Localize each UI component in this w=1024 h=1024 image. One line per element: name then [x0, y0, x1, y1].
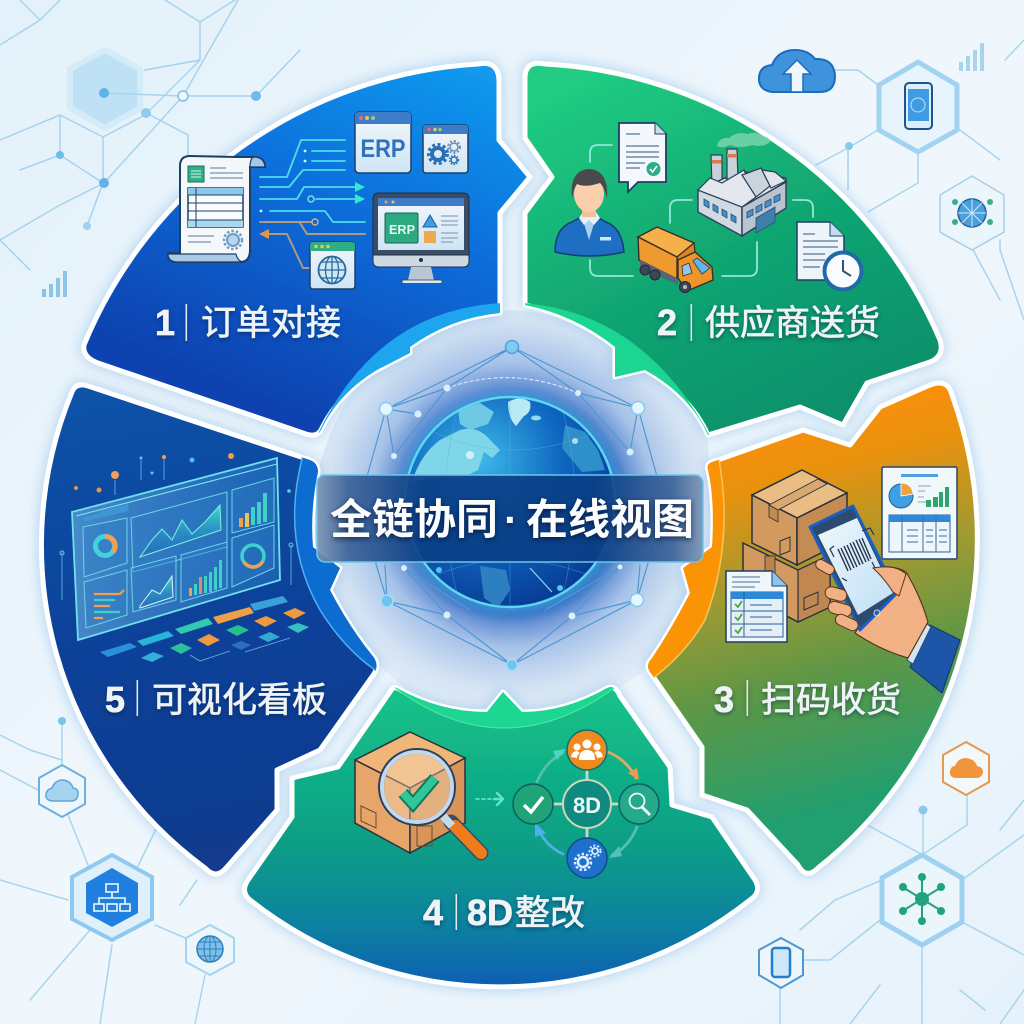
- icon: speech document: [619, 123, 666, 192]
- icon: document clock: [797, 222, 862, 290]
- icon: hand back: [855, 567, 928, 658]
- icon: fingers: [814, 558, 860, 633]
- icon: cloud upload: [759, 50, 835, 92]
- center halo: [313, 310, 712, 715]
- label: 8D corrective action: 整改: [515, 894, 585, 933]
- 8D cycle diagram: 8D: [573, 793, 601, 818]
- label: supplier delivery: 2: [657, 302, 677, 343]
- icon: hexagon orange cloud: [943, 742, 989, 795]
- network lines: [366, 347, 658, 665]
- panel 5: visual dashboard: [41, 385, 420, 874]
- icon: cuff: [907, 623, 931, 664]
- background network top left: [0, 0, 300, 270]
- background network bottom left: [0, 724, 205, 1024]
- label: order integration: 订单对接: [201, 304, 341, 343]
- label: visual dashboard: 5: [105, 679, 125, 720]
- label: 8D corrective action: 8D: [467, 892, 513, 933]
- icon: magnifier with check: [381, 751, 481, 853]
- title banner: [317, 475, 703, 562]
- icon: hexagon hierarchy: [72, 855, 152, 940]
- label: visual dashboard: 可视化看板: [152, 681, 327, 720]
- label: 8D corrective action: 4: [423, 892, 443, 933]
- label: order integration: 1: [155, 302, 175, 343]
- icon: small bar chart right: [959, 43, 984, 71]
- label: 8D corrective action: [423, 892, 585, 933]
- panel 1: order integration: [84, 63, 530, 440]
- icon: monitor with ERP: [373, 193, 469, 284]
- panel 3: scan receiving: [620, 383, 977, 873]
- indicator dots: [60, 453, 293, 600]
- icon: hexagon globe network: [940, 176, 1004, 250]
- globe: [398, 390, 622, 614]
- data flow lines: [259, 140, 365, 268]
- title banner: 在线视图: [526, 496, 694, 543]
- icon: truck: [638, 227, 713, 292]
- network nodes: [380, 340, 644, 670]
- arrow to 8D cycle: [476, 793, 503, 805]
- icon: order document: [168, 156, 265, 262]
- icon: hexagon globe: [186, 925, 234, 975]
- panel 2: supplier delivery: [522, 63, 941, 440]
- icon: small bar chart left: [42, 271, 67, 297]
- icon: report: [882, 467, 957, 559]
- label: scan receiving: 3: [714, 679, 734, 720]
- icon: smartphone scanning barcode: [810, 506, 897, 630]
- title banner: ·: [504, 496, 518, 543]
- center globe network: [366, 340, 658, 670]
- icon: hexagon phone: [879, 62, 957, 152]
- panel 4: 8D corrective action: [244, 650, 758, 987]
- icon: stacked boxes: [743, 470, 847, 622]
- icon: checklist: [726, 571, 787, 642]
- icon: gear window: [423, 125, 468, 173]
- icon: ERP window: [355, 112, 411, 173]
- title banner: 全链协同: [330, 496, 498, 543]
- icon: thumb: [873, 567, 906, 596]
- background network bottom right: [780, 794, 1024, 1024]
- icon: hand sleeve: [910, 625, 960, 693]
- icon: hexagon phone small: [759, 938, 803, 988]
- icon: hexagon green network: [882, 855, 962, 945]
- icon: box under magnifier: [355, 732, 465, 853]
- icon: monitor with ERP: ERP: [389, 223, 415, 237]
- icon: person: [555, 169, 624, 256]
- icon: hexagon cloud: [39, 717, 85, 817]
- background network top right: [816, 40, 1024, 320]
- label: supplier delivery: 供应商送货: [705, 304, 880, 343]
- dashboard screen: [72, 458, 280, 640]
- flow tiles: [100, 596, 309, 662]
- icon: globe window: [310, 242, 355, 289]
- icon: factory: [698, 133, 786, 236]
- icon: ERP window: ERP: [360, 135, 406, 163]
- 8D cycle diagram: [513, 730, 659, 878]
- label: scan receiving: 扫码收货: [761, 681, 901, 720]
- connector brackets: [590, 145, 813, 276]
